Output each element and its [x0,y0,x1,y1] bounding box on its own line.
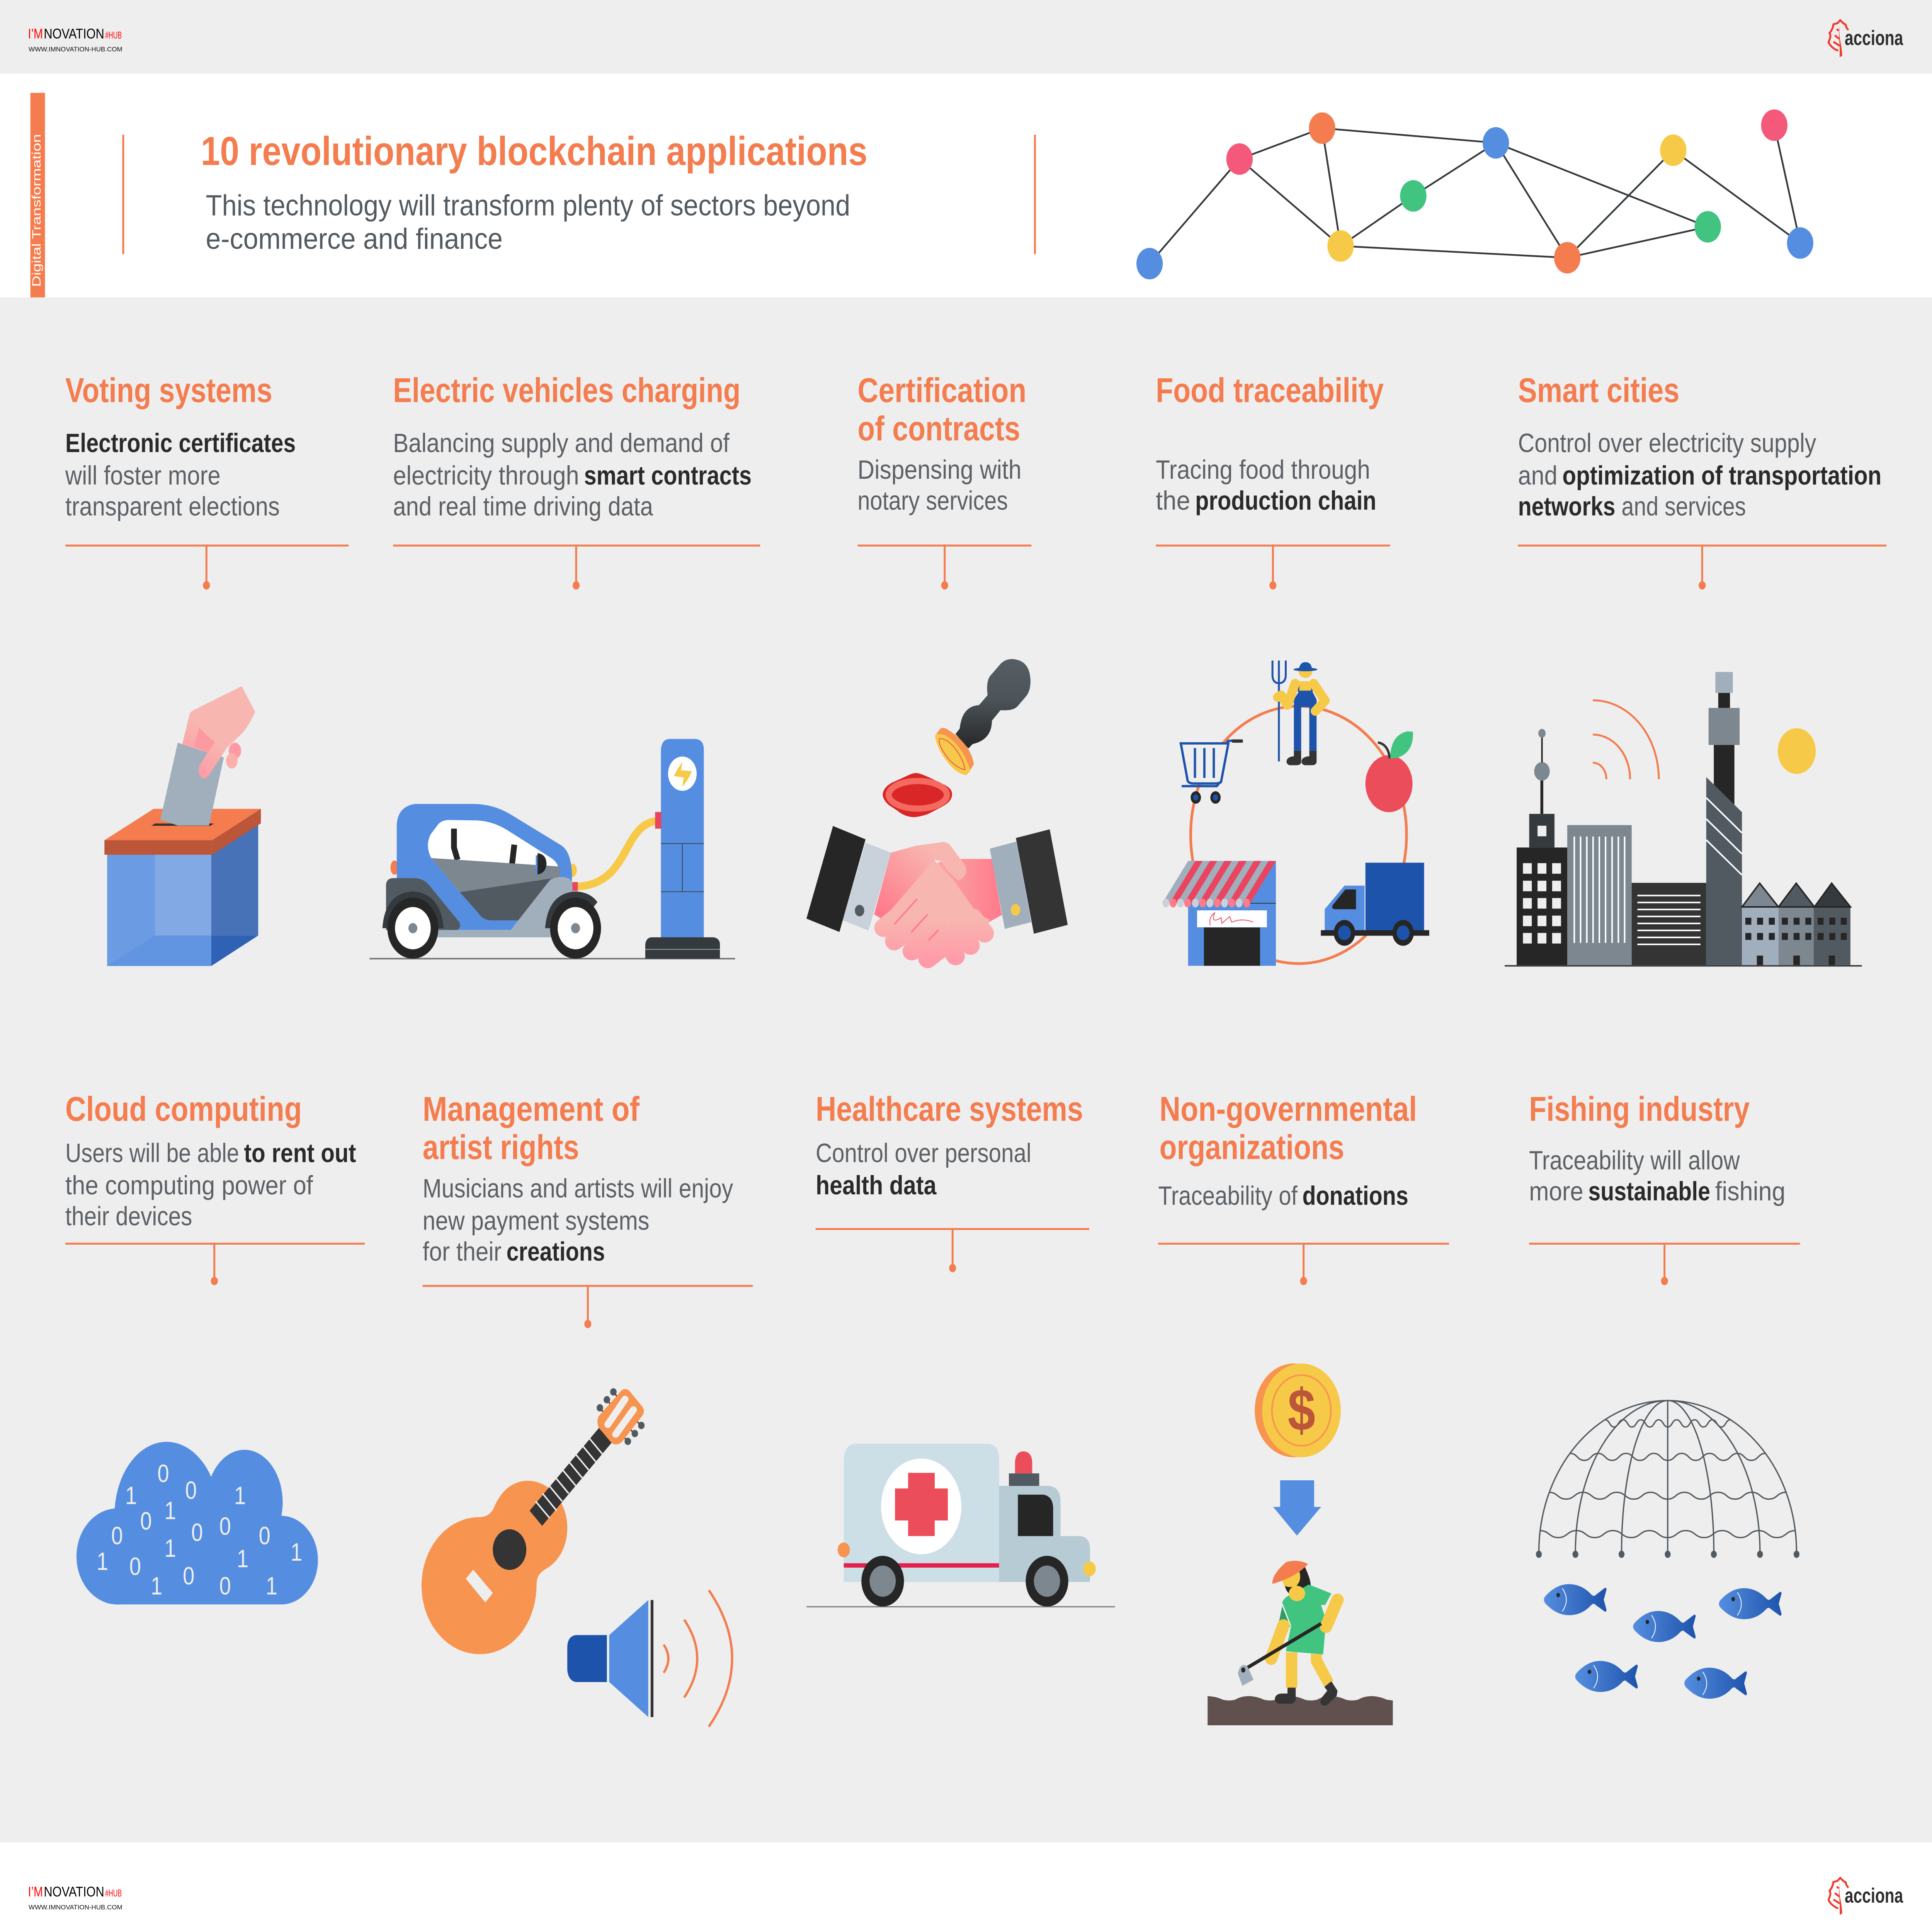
icon: food chain cycle [1162,661,1429,966]
connector: voting systems [65,546,349,590]
logo: I'MNOVATION #HUB: WWW.IMNOVATION-HUB.COM [29,46,122,53]
subtitle: e-commerce and finance [206,222,503,255]
text: artist rights: for their [423,1237,502,1267]
logo: acciona [1828,20,1903,57]
icon: cloud with binary digits: 1 [234,1481,246,1510]
icon: cloud with binary digits: 1 [125,1481,137,1510]
text: smart cities: and [1518,461,1558,490]
text: non-governmental [1158,1181,1408,1211]
header accents [123,135,1035,254]
text: fishing industry: Traceability will allow [1529,1146,1740,1175]
panel: electric vehicles charging [369,371,760,959]
text: fishing industry: sustainable [1588,1177,1710,1206]
connector: electric vehicles [393,546,760,590]
text: food traceability: Tracing food through [1156,455,1370,485]
text: non-governmental: Traceability of [1158,1181,1298,1211]
text: electric vehicles charging: and real time driving data [393,492,653,521]
title block [201,129,867,255]
panel: certification of contracts [806,371,1068,959]
text: certification [857,455,1022,515]
icon: cloud with binary digits: 1 [164,1497,176,1524]
icon: cloud with binary digits: 0 [157,1459,169,1488]
icon: ambulance [806,1444,1115,1607]
connector: fishing industry [1529,1244,1800,1285]
logo: I'MNOVATION #HUB [28,26,122,53]
text: voting systems: transparent elections [65,492,280,521]
panel: healthcare systems [806,1090,1115,1607]
icon: cloud with binary digits: 1 [164,1534,176,1562]
text: voting systems: Electronic certificates [65,429,296,458]
icon: cloud with binary digits: 0 [219,1572,231,1600]
footer logo: I'MNOVATION #HUB: #HUB [105,1888,122,1898]
footer band [0,1842,1932,1932]
footer logo: I'MNOVATION #HUB: NOVATION [44,1884,104,1900]
text: fishing industry [1529,1146,1786,1206]
icon: handshake and wax seal stamp [806,659,1068,959]
icon: cloud with binary digits: 0 [219,1512,231,1540]
icon: ballot box [104,686,261,966]
logo: I'MNOVATION #HUB: #HUB [105,30,122,41]
fish 4 [1575,1661,1638,1692]
icon: cloud with binary digits: 1 [151,1572,162,1600]
heading: smart cities: Smart cities [1518,371,1679,410]
heading: management of artist rights: artist rights [423,1128,579,1167]
footer logo: I'MNOVATION #HUB: I’M [28,1884,43,1900]
title band [0,74,1932,298]
sidebar: Digital Transformation: Digital Transformation [30,134,43,287]
heading: healthcare systems: Healthcare systems [816,1090,1083,1128]
heading: certification of contracts: of contracts [857,409,1020,448]
panel: non-governmental organizations [1158,1090,1449,1725]
connector: food traceability [1156,546,1390,590]
icon: cloud with binary digits: 0 [191,1519,203,1546]
fish 3 [1719,1588,1781,1619]
panel: management of artist rights [422,1090,753,1727]
title: 10 revolutionary blockchain applications [201,129,867,174]
footer logo: I'MNOVATION #HUB [28,1884,122,1911]
text: non-governmental: donations [1303,1181,1408,1211]
icon: cloud with binary digits [77,1442,318,1605]
text: fishing industry: more [1529,1177,1583,1206]
fish 2 [1633,1611,1696,1642]
heading: management of artist rights: Management of [423,1090,639,1128]
sidebar: Digital Transformation [30,93,45,298]
icon: cloud with binary digits: 0 [259,1522,270,1549]
text: cloud computing: the computing power of [65,1171,313,1200]
text: electric vehicles charging [393,429,752,521]
heading: food traceability: Food traceability [1156,371,1384,410]
icon: cloud with binary digits: 0 [185,1476,197,1504]
text: food traceability: the [1156,486,1190,515]
heading: certification of contracts [857,371,1026,448]
heading: certification of contracts: Certification [857,371,1026,410]
fish 5 [1684,1668,1747,1699]
footer logo: acciona: acciona [1845,1884,1903,1907]
icon: coin, arrow and worker [1208,1364,1393,1725]
fish 1 [1544,1584,1607,1615]
icon: guitar and speaker [422,1388,732,1727]
logo: I'MNOVATION #HUB: NOVATION [44,26,104,42]
text: artist rights: new payment systems [423,1206,649,1236]
subtitle [206,189,850,255]
text: food traceability: production chain [1195,486,1376,515]
icon: fishing net and fish [1536,1401,1799,1699]
icon: cloud with binary digits: 0 [140,1507,152,1535]
text: fishing industry: fishing [1715,1177,1786,1206]
panel: smart cities [1505,371,1886,966]
subtitle: This technology will transform plenty of sectors beyond [206,189,850,222]
logo: I'MNOVATION #HUB: I’M [28,26,43,42]
heading: cloud computing: Cloud computing [65,1090,302,1128]
icon: cloud with binary digits: 1 [97,1548,108,1575]
text: smart cities: networks [1518,492,1615,521]
logo: acciona: acciona [1845,26,1903,49]
connector: certification [858,546,1031,590]
icon: cloud with binary digits: 0 [111,1522,123,1549]
text: smart cities: and services [1621,492,1746,521]
header band [28,20,1903,57]
text: electric vehicles charging: Balancing supply and demand of [393,429,730,458]
panel: fishing industry [1529,1090,1800,1699]
icon: cloud with binary digits: 0 [129,1552,141,1580]
heading: non-governmental organizations: organizations [1160,1128,1344,1167]
text: cloud computing: Users will be able [65,1139,239,1168]
footer logo: I'MNOVATION #HUB: WWW.IMNOVATION-HUB.COM [29,1904,122,1911]
icon: cloud with binary digits: 1 [291,1538,302,1566]
text: certification: notary services [857,486,1008,515]
text: cloud computing: their devices [65,1202,192,1231]
text: certification: Dispensing with [857,455,1022,485]
icon: cloud with binary digits: 1 [266,1572,277,1600]
heading: non-governmental organizations [1160,1090,1417,1167]
blockchain network graphic [1136,109,1813,279]
icon: city skyline [1505,672,1862,966]
text: smart cities: optimization of transportation [1562,461,1881,490]
text: healthcare systems: health data [816,1171,937,1200]
connector: smart cities [1518,546,1886,590]
text: cloud computing: to rent out [244,1139,356,1168]
text: healthcare systems: Control over personal [816,1139,1031,1168]
heading: voting systems: Voting systems [65,371,272,410]
icon: cloud with binary digits: 0 [183,1562,194,1590]
heading: electric vehicles charging: Electric vehicles charging [393,371,740,410]
footer logo: acciona [1828,1878,1903,1915]
text: food traceability [1156,455,1376,515]
text: electric vehicles charging: smart contracts [584,461,752,490]
icon: cloud with binary digits: 1 [237,1544,248,1573]
heading: management of artist rights [423,1090,639,1167]
panel: voting systems [65,371,349,966]
heading: fishing industry: Fishing industry [1529,1090,1750,1128]
panel: food traceability [1156,371,1429,966]
icon: coin, arrow and worker: $ [1288,1377,1315,1444]
panel: cloud computing [65,1090,365,1605]
text: electric vehicles charging: electricity through [393,461,579,490]
text: voting systems: will foster more [65,461,221,490]
text: artist rights: Musicians and artists will enjoy [423,1174,733,1203]
text: artist rights: creations [507,1237,605,1267]
connector: artist rights [423,1286,753,1328]
text: cloud computing [65,1139,356,1231]
connector: cloud computing [65,1244,365,1285]
connector: non-governmental [1158,1244,1449,1285]
icon: electric car and charging station [369,739,735,959]
text: voting systems [65,429,296,521]
text: artist rights [423,1174,733,1267]
heading: non-governmental organizations: Non-governmental [1160,1090,1417,1128]
text: smart cities [1518,429,1881,521]
text: healthcare systems [816,1139,1031,1200]
fishing net [1539,1401,1796,1552]
text: smart cities: Control over electricity supply [1518,429,1816,458]
connector: healthcare systems [816,1229,1089,1272]
